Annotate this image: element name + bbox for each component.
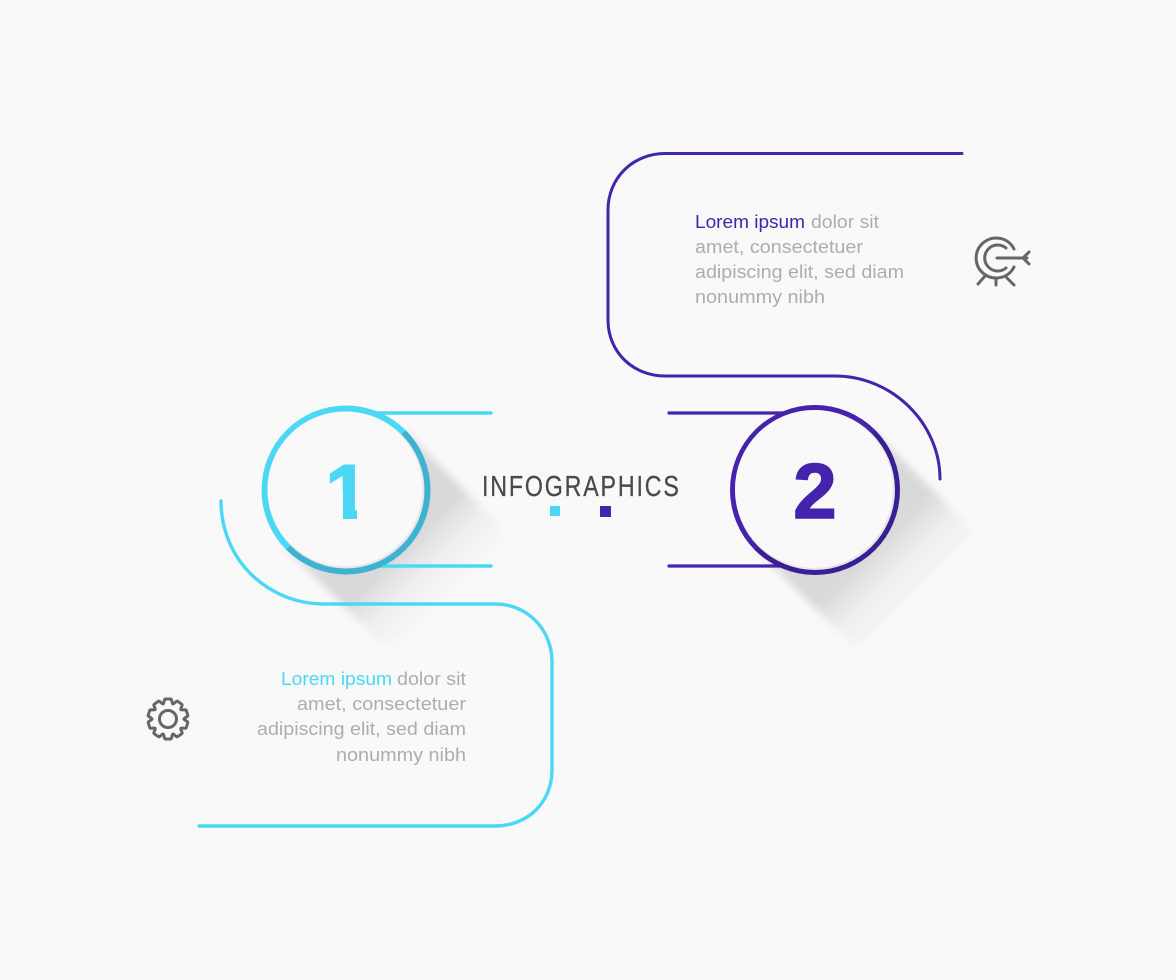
text block: step 2: [695, 212, 904, 307]
connector lines: step 1: [375, 413, 491, 566]
icon: gear: [147, 699, 189, 739]
icon: target: [976, 238, 1029, 285]
text block: step 1: Lorem ipsum: [281, 669, 392, 689]
text block: step 2: Lorem ipsum: [695, 212, 805, 232]
digit 2: 2: [793, 447, 837, 535]
marker: purple square: [600, 506, 611, 517]
title: INFOGRAPHICS: [482, 469, 679, 503]
number badge 1: [262, 406, 430, 574]
text block: step 1: [257, 669, 466, 765]
text block: step 2: nonummy nibh: [695, 287, 825, 307]
panel: step 1 outline: [199, 501, 552, 826]
number badge 2: [730, 405, 900, 575]
marker: cyan square: [550, 506, 560, 516]
text block: step 2: amet, consectetuer: [695, 237, 863, 257]
digit 1: 1: [325, 448, 369, 536]
text block: step 2: dolor sit: [811, 212, 879, 232]
panel: step 2 outline: [608, 154, 962, 479]
text block: step 1: amet, consectetuer: [297, 694, 466, 714]
text block: step 1: dolor sit: [397, 669, 466, 689]
text block: step 1: nonummy nibh: [336, 745, 466, 765]
shadow: circle 2: [756, 431, 974, 649]
text block: step 1: adipiscing elit, sed diam: [257, 719, 466, 739]
connector lines: step 2: [669, 413, 785, 566]
shadow: circle 1: [287, 431, 505, 649]
text block: step 2: adipiscing elit, sed diam: [695, 262, 904, 282]
